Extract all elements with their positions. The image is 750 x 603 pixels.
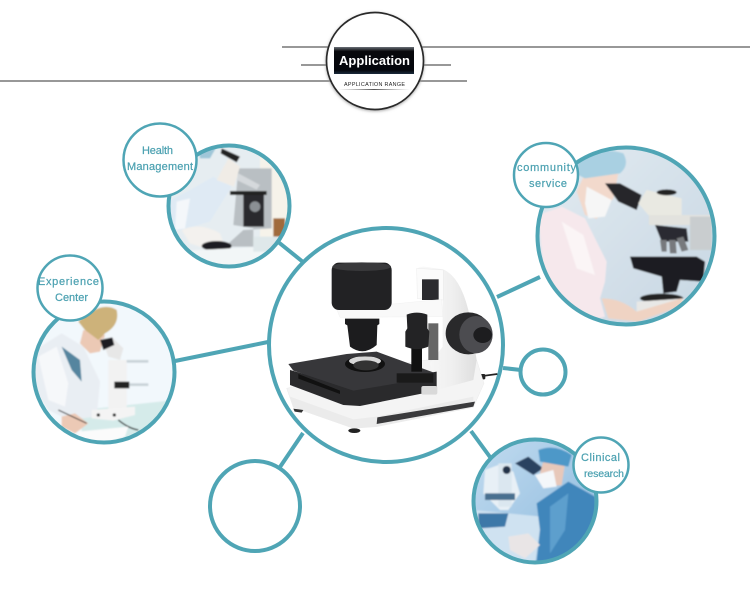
- panel: community service photo: [535, 145, 718, 328]
- panel: health management photo: [163, 142, 297, 272]
- callout: community service: community: [517, 162, 576, 174]
- panel: experience center photo: [32, 300, 175, 447]
- microscope: [287, 262, 497, 433]
- header badge: [326, 12, 424, 111]
- callout: health management: Management: [127, 161, 193, 173]
- empty large circle: [210, 461, 300, 551]
- callout: clinical research: Clinical: [581, 452, 620, 464]
- stage top: [288, 352, 434, 391]
- base: [287, 360, 484, 428]
- callout: community service: [514, 143, 578, 207]
- header lines: [0, 47, 750, 81]
- stage lower: [290, 370, 437, 406]
- callout: health management: [124, 124, 196, 196]
- camera: [332, 263, 392, 310]
- underline: [338, 89, 410, 90]
- callout: clinical research: [574, 438, 628, 492]
- callout: health management: Health: [142, 145, 173, 157]
- callout: experience center: Experience: [38, 276, 99, 288]
- callout: community service: service: [529, 178, 567, 190]
- horizontal arm: [337, 299, 443, 317]
- title: Application: [339, 53, 410, 68]
- objective: [345, 319, 379, 351]
- small stage knob: [397, 373, 433, 383]
- specimen dome: [345, 356, 385, 372]
- connectors: [175, 241, 540, 467]
- callout: experience center: [38, 256, 102, 320]
- central product circle: [269, 228, 503, 462]
- callout: clinical research: research: [584, 468, 624, 480]
- subtitle: APPLICATION RANGE: [344, 82, 405, 88]
- empty small circle: [520, 350, 566, 394]
- title bar: [334, 47, 414, 74]
- panel: clinical research photo: [472, 437, 598, 565]
- focus column: [411, 348, 422, 372]
- arm: [417, 267, 477, 390]
- callout: experience center: Center: [55, 292, 88, 304]
- side knob: [446, 312, 491, 354]
